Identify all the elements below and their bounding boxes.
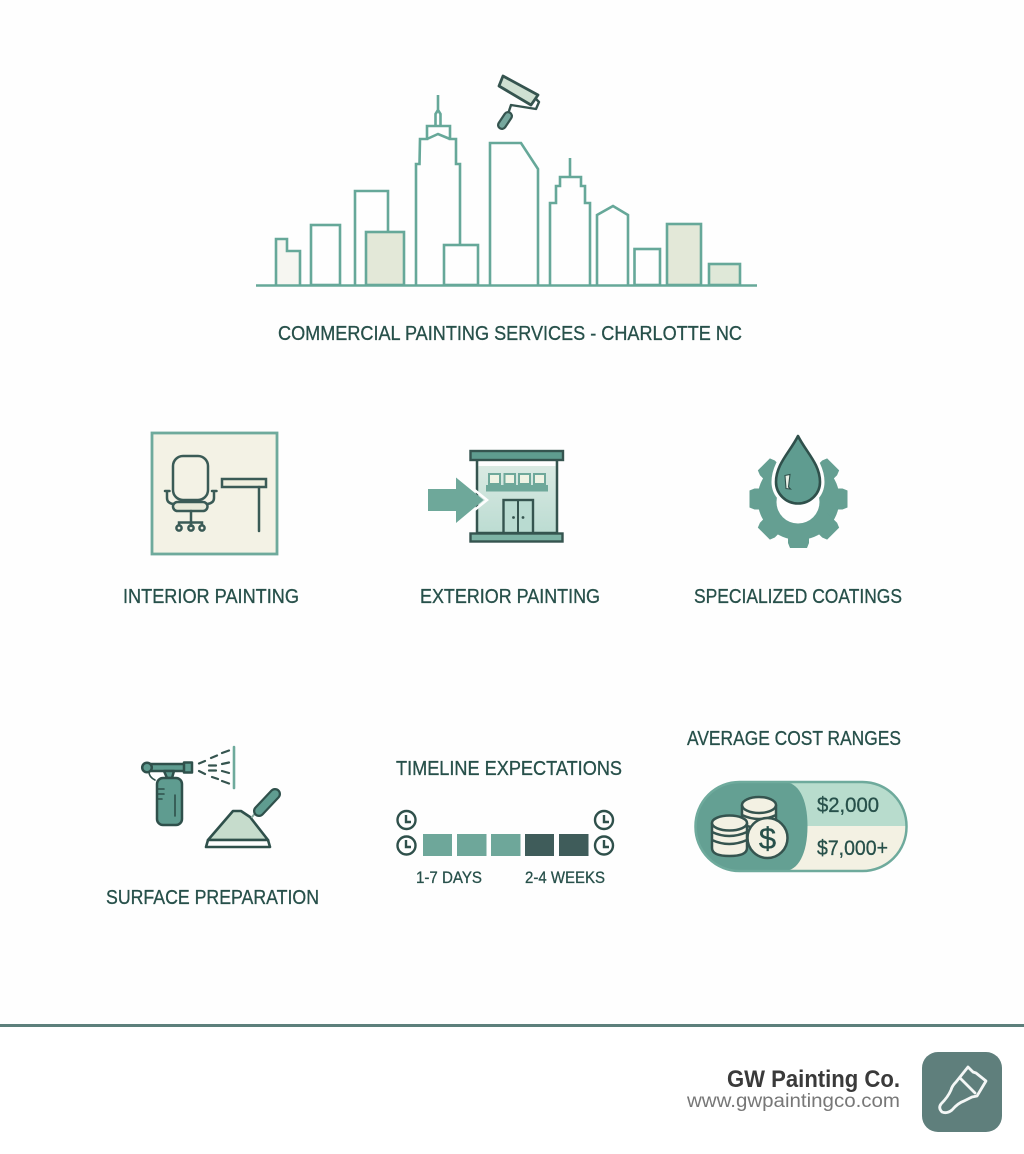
arrow xyxy=(428,478,484,523)
timeline label: days: 1-7 DAYS xyxy=(416,868,482,887)
chair xyxy=(165,456,216,531)
cost range pill xyxy=(694,782,907,871)
icon: spray bottle and trowel xyxy=(142,747,275,847)
timeline chart xyxy=(398,811,613,887)
title: COMMERCIAL PAINTING SERVICES - CHARLOTTE NC xyxy=(278,323,742,345)
building: front block xyxy=(444,245,478,285)
label: timeline expectations: TIMELINE EXPECTATIONS xyxy=(396,758,622,780)
building: stepped tower xyxy=(550,158,590,285)
building: filled tall block xyxy=(667,224,701,285)
ground line xyxy=(256,284,757,287)
label: exterior painting: EXTERIOR PAINTING xyxy=(420,586,600,608)
trowel xyxy=(206,794,275,847)
timeline label: weeks: 2-4 WEEKS xyxy=(525,868,605,887)
building: main tower xyxy=(416,95,460,285)
icon: paint brush xyxy=(940,1067,986,1113)
logo badge xyxy=(922,1052,1002,1132)
label: surface preparation: SURFACE PREPARATION xyxy=(106,887,319,909)
building: tall block behind xyxy=(355,191,388,285)
label: interior painting: INTERIOR PAINTING xyxy=(123,586,299,608)
building: chamfered tower xyxy=(490,143,538,285)
building: small block xyxy=(634,249,660,285)
icon: exterior building with arrow xyxy=(428,451,563,542)
label: specialized coatings: SPECIALIZED COATINGS xyxy=(694,586,902,608)
icon: gear with paint drop xyxy=(750,436,848,548)
dollar symbol: $ xyxy=(759,821,776,856)
footer band xyxy=(0,1024,1024,1154)
wall line xyxy=(233,747,235,788)
building: filled block xyxy=(366,232,404,285)
desk xyxy=(222,479,266,531)
label: average cost ranges: AVERAGE COST RANGES xyxy=(687,728,901,750)
icon: coin stacks xyxy=(712,797,788,858)
icon: interior office xyxy=(152,433,277,554)
cost low: $2,000 xyxy=(817,794,879,817)
building: small stepped xyxy=(276,239,300,285)
timeline clocks xyxy=(398,811,613,854)
spray mist xyxy=(199,750,229,784)
building: filled low block xyxy=(709,264,740,285)
skyline illustration xyxy=(256,95,757,286)
spray bottle xyxy=(142,762,192,825)
building: peaked roof xyxy=(597,206,628,285)
footer url: www.gwpaintingco.com xyxy=(686,1091,900,1112)
footer brand name: GW Painting Co. xyxy=(727,1066,900,1093)
building: low block xyxy=(311,225,340,285)
timeline bars xyxy=(423,834,588,856)
icon: paint roller xyxy=(499,76,539,125)
cost high: $7,000+ xyxy=(817,837,888,860)
